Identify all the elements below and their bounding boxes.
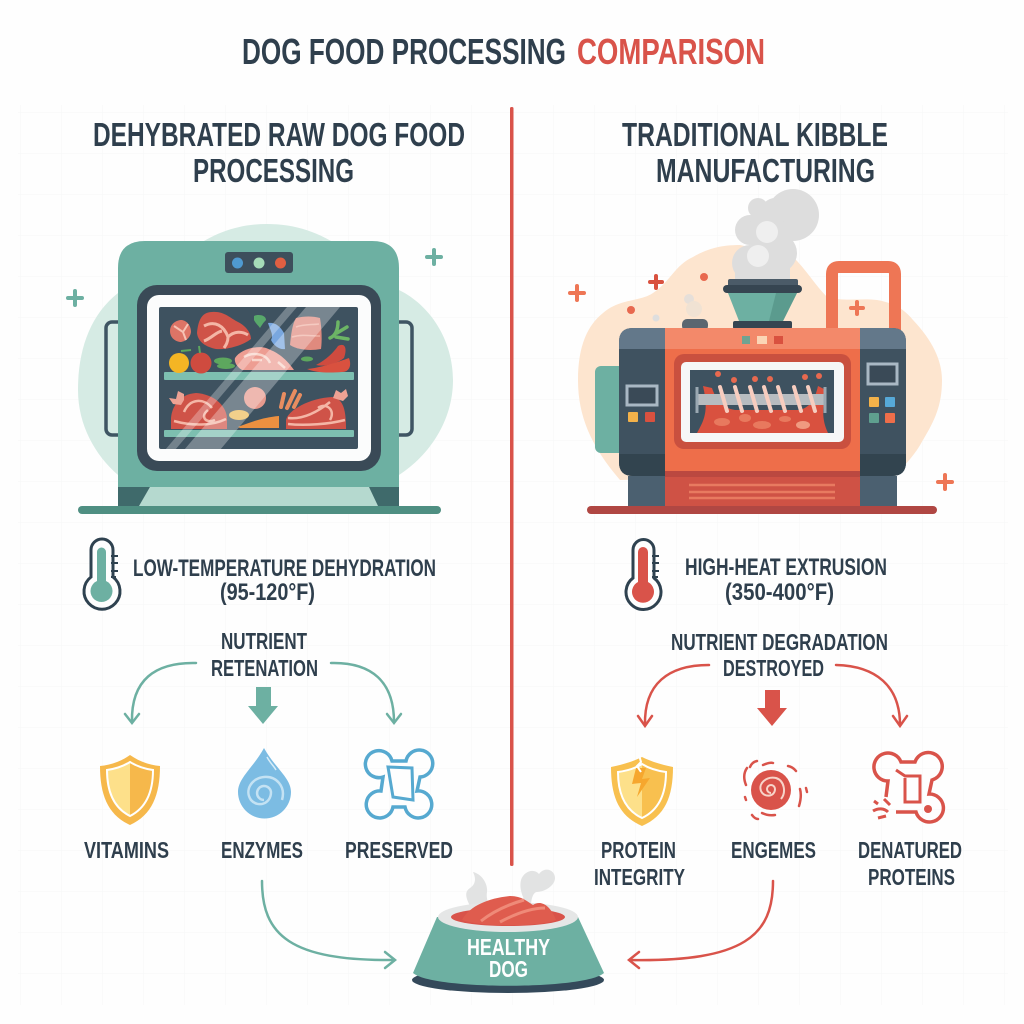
right control column	[860, 328, 906, 506]
text: low-temperature dehydration	[133, 555, 436, 606]
icon: thermometer low	[84, 539, 120, 609]
labels: degraded nutrients: ENGEMES	[731, 837, 816, 863]
heading: traditional kibble: MANUFACTURING	[656, 152, 875, 189]
indicator lights	[742, 336, 783, 344]
heading: traditional kibble	[622, 116, 888, 189]
labels: degraded nutrients	[594, 837, 962, 890]
icon: damaged enzyme spiral	[744, 761, 807, 819]
labels: degraded nutrients: PROTEIN	[601, 837, 676, 863]
icon: preserved bone molecule	[365, 750, 433, 818]
labels: retained nutrients	[84, 837, 453, 863]
title: COMPARISON	[577, 31, 765, 72]
text: nutrient degradation: DESTROYED	[723, 655, 824, 681]
text: high-heat extrusion: (350-400°F)	[725, 579, 834, 606]
text: nutrient retention: NUTRIENT	[221, 628, 307, 654]
text: low-temperature dehydration: LOW-TEMPERATURE DEHYDRATION	[133, 555, 436, 582]
illustration: dehydrator oven	[68, 224, 453, 514]
small steam vent	[682, 294, 708, 331]
food on top shelf	[169, 312, 350, 374]
bowl steam	[466, 870, 555, 906]
icon: cracked shield	[611, 755, 673, 826]
hopper	[723, 279, 802, 329]
side tank	[595, 366, 625, 453]
heading: dehydrated raw	[93, 116, 465, 189]
machine body	[665, 328, 860, 506]
bowl food	[462, 896, 556, 925]
base bar	[587, 506, 937, 514]
labels: retained nutrients: ENZYMES	[221, 837, 303, 863]
labels: retained nutrients: VITAMINS	[84, 837, 169, 863]
text: nutrient degradation: NUTRIENT DEGRADATION	[671, 629, 888, 655]
heading: dehydrated raw: PROCESSING	[193, 152, 354, 189]
arrow: left to bowl	[262, 881, 395, 968]
sparkles and dots	[570, 273, 952, 489]
heading: traditional kibble: TRADITIONAL KIBBLE	[622, 116, 888, 153]
text: low-temperature dehydration: (95-120°F)	[220, 579, 315, 606]
illustration: kibble extruder	[570, 189, 952, 514]
labels: retained nutrients: PRESERVED	[345, 837, 453, 863]
arrows: degradation branches	[638, 665, 907, 726]
text: high-heat extrusion	[685, 554, 887, 606]
text: high-heat extrusion: HIGH-HEAT EXTRUSION	[685, 554, 887, 581]
arrow: right to bowl	[629, 881, 773, 968]
extruder window	[674, 354, 851, 449]
illustration: dog bowl	[412, 870, 604, 993]
handle frame	[832, 267, 895, 330]
icon: thermometer high	[626, 540, 661, 610]
bowl label: DOG	[489, 956, 528, 982]
text: nutrient retention: RETENATION	[211, 655, 318, 681]
oven door	[137, 285, 381, 471]
title: DOG FOOD PROCESSING	[242, 31, 566, 72]
heading: dehydrated raw: DEHYBRATED RAW DOG FOOD	[93, 116, 465, 153]
labels: degraded nutrients: PROTEINS	[868, 864, 955, 890]
bowl label	[467, 934, 550, 982]
text: nutrient degradation	[671, 629, 888, 681]
food on bottom shelf	[169, 387, 348, 429]
icon: vitamins shield	[100, 755, 160, 825]
labels: degraded nutrients: INTEGRITY	[594, 864, 685, 890]
icon: denatured protein	[873, 753, 943, 822]
icon: enzymes drop	[238, 748, 291, 818]
left control column	[619, 328, 665, 506]
arrows: retention branches	[125, 663, 401, 724]
bowl label: HEALTHY	[467, 934, 550, 960]
labels: degraded nutrients: DENATURED	[858, 837, 962, 863]
sparkle plus signs	[68, 250, 441, 305]
glass reflection	[165, 307, 340, 450]
control panel	[225, 252, 293, 273]
steam cloud	[732, 189, 819, 286]
text: nutrient retention	[211, 628, 318, 681]
center divider	[510, 107, 514, 866]
